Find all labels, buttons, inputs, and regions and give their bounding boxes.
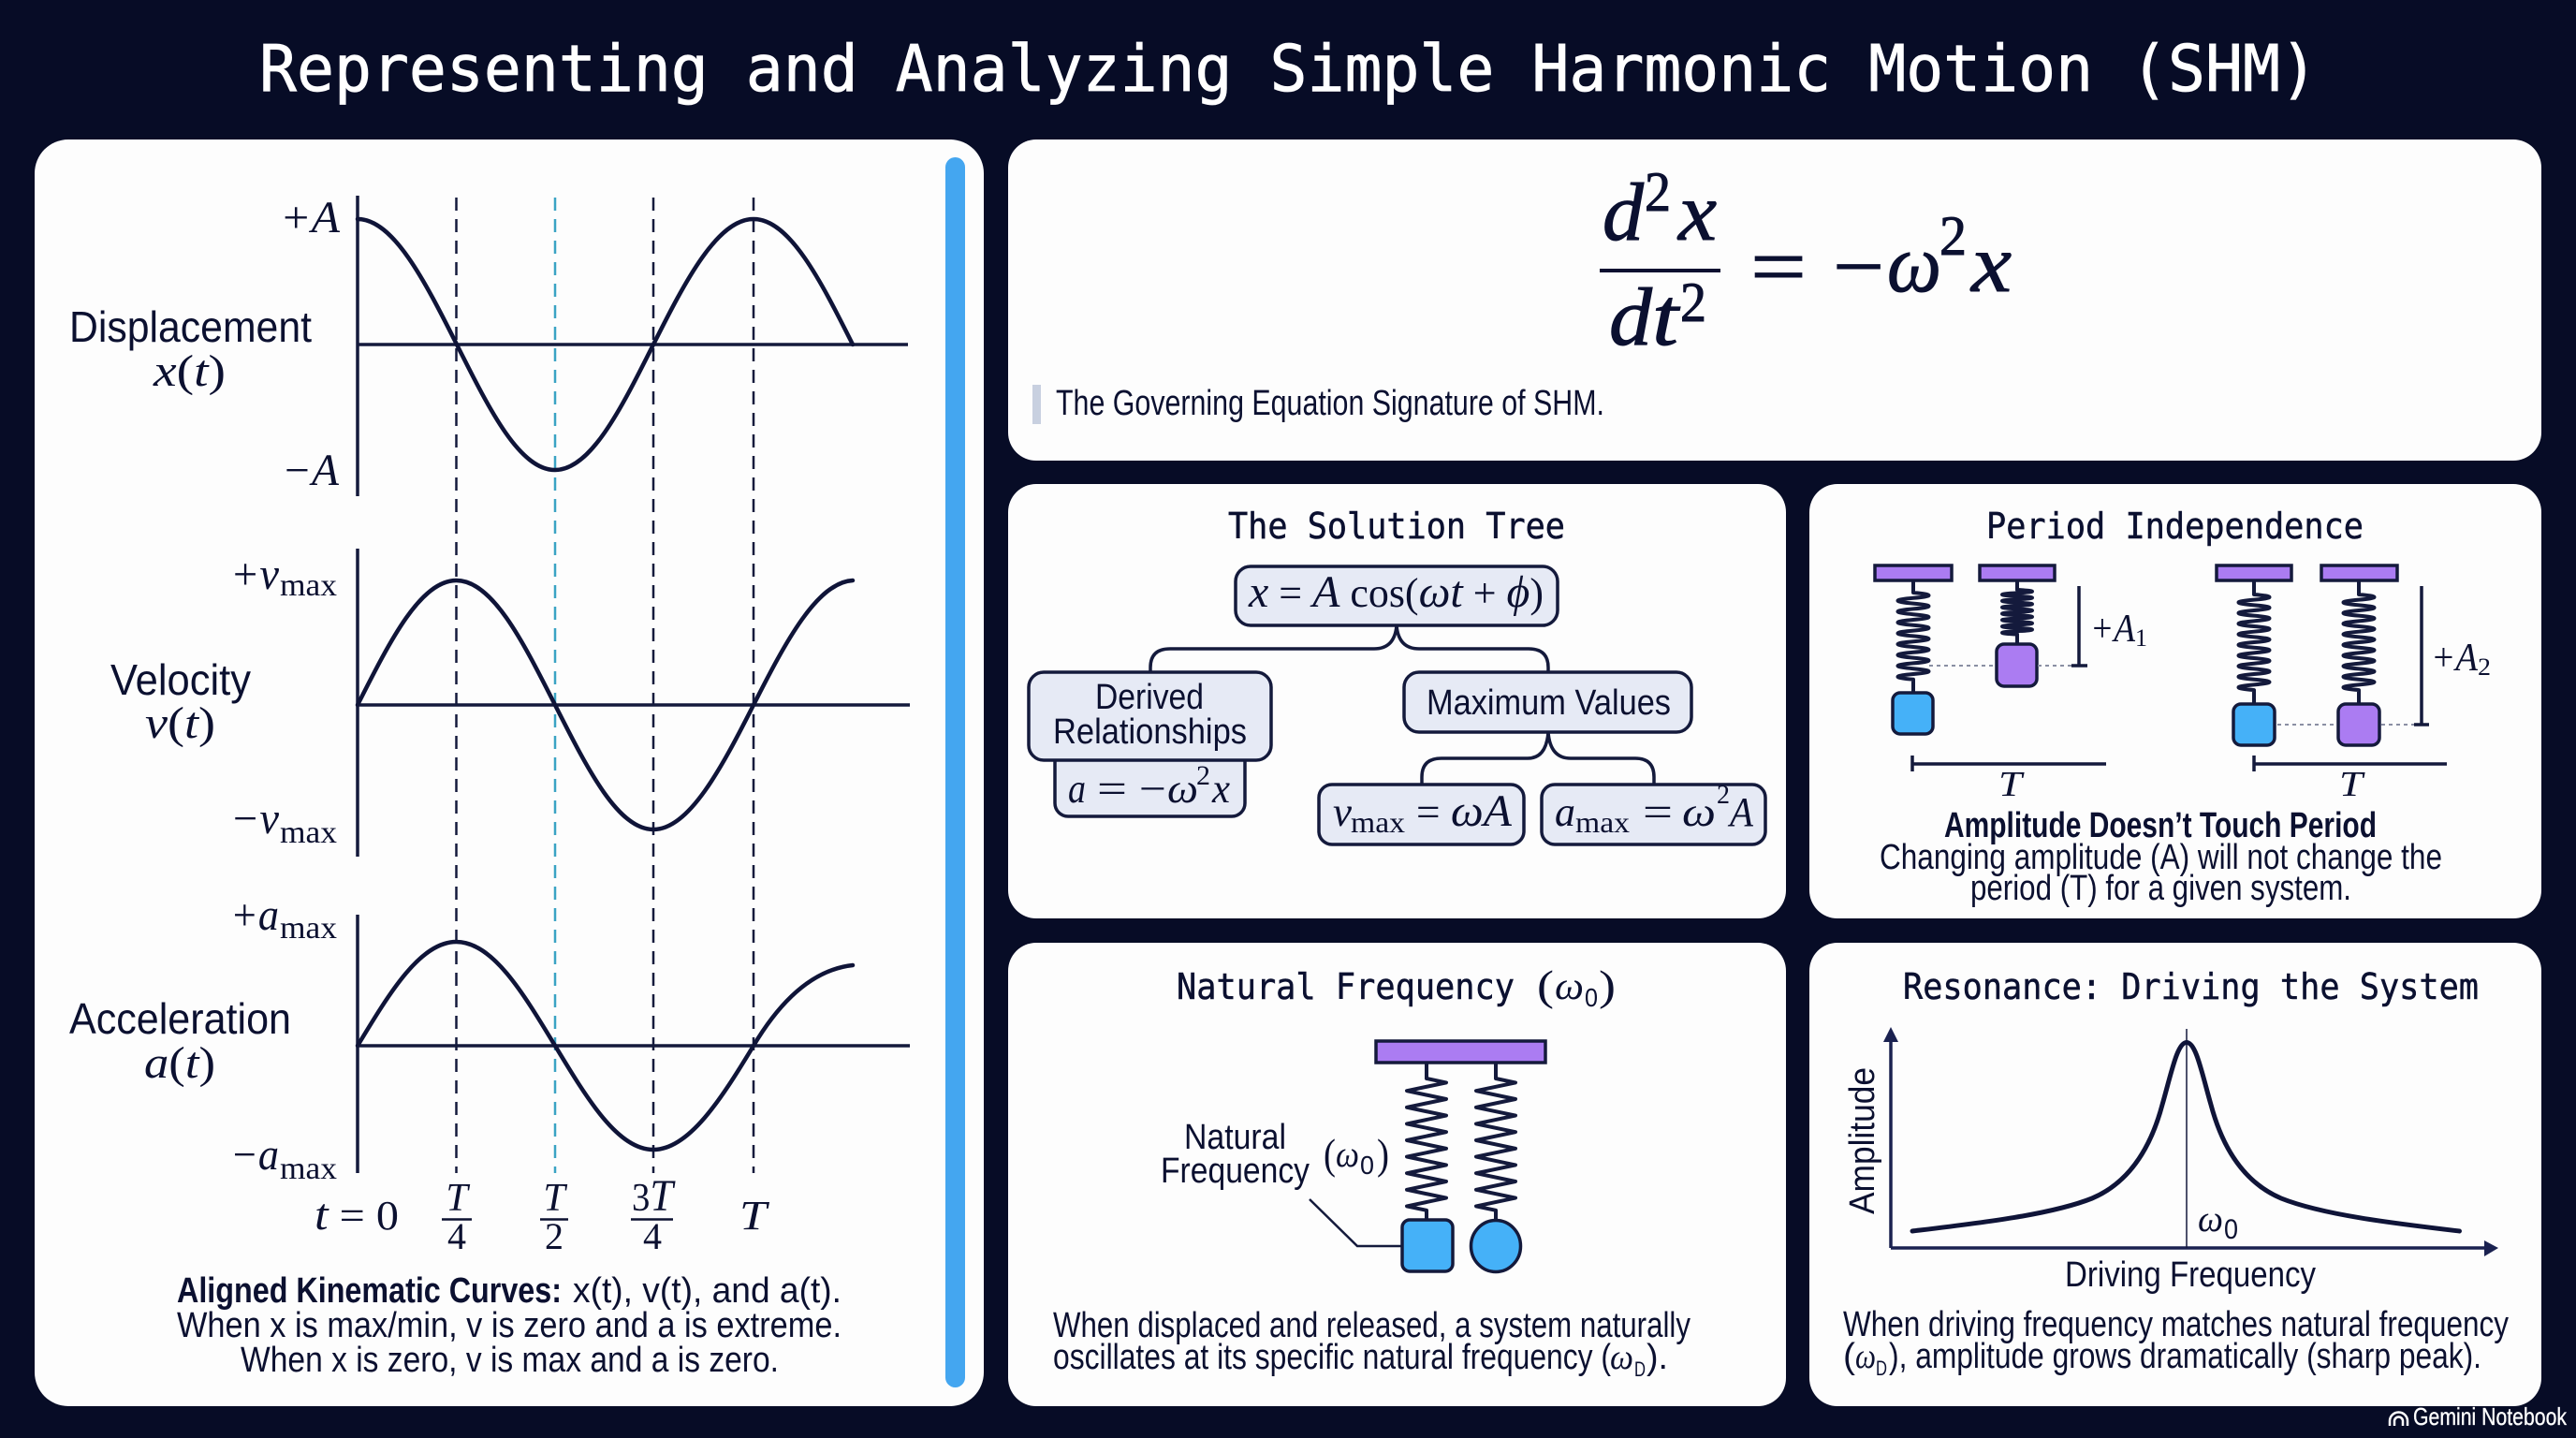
time axis labels: t = 0 xyxy=(315,1190,399,1240)
heading: Natural Frequency xyxy=(1177,966,1515,1007)
caption: amplitude and period: Amplitude Doesn’t Touch Period xyxy=(1944,806,2377,845)
time axis labels: T xyxy=(446,1177,470,1220)
node: v max: v xyxy=(1333,789,1352,835)
resonance chart: Driving Frequency xyxy=(2065,1255,2316,1295)
caption: natural frequency: ). xyxy=(1647,1338,1668,1377)
time axis labels: 3T xyxy=(632,1171,676,1221)
equation: d xyxy=(1609,272,1653,363)
node: derived equation: − xyxy=(1139,766,1166,812)
node: a max: A xyxy=(1727,789,1754,835)
caption: amplitude and period: period (T) for a given system. xyxy=(1970,869,2351,908)
chart: displacement xyxy=(69,193,908,496)
equation: d xyxy=(1603,168,1645,258)
title: Representing and Analyzing Simple Harmonic Motion (SHM) xyxy=(259,32,2318,107)
spring pair: amplitude A2: T xyxy=(2339,765,2365,804)
heading: ( xyxy=(1537,961,1554,1009)
caption: aligned curves: When x is max/min, v is zero and a is extreme. xyxy=(177,1306,842,1345)
equation xyxy=(1600,161,2012,363)
node: a max: ω xyxy=(1682,789,1716,835)
resonance chart: ω xyxy=(2198,1197,2223,1240)
chart: displacement: x(t) xyxy=(153,346,226,396)
heading: ) xyxy=(1599,961,1616,1009)
caption: resonance: ω xyxy=(1855,1337,1876,1376)
chart: velocity: max xyxy=(280,568,337,603)
chart: velocity xyxy=(110,549,910,857)
caption: resonance xyxy=(1843,1305,2509,1380)
node: derived relationships xyxy=(1029,672,1271,760)
caption: amplitude and period xyxy=(1880,806,2442,908)
equation: t xyxy=(1652,272,1681,363)
chart: velocity: v(t) xyxy=(145,698,215,748)
time axis labels: T xyxy=(739,1193,770,1239)
time axis labels xyxy=(315,1171,770,1257)
caption: natural frequency: ω xyxy=(1610,1338,1633,1377)
panel: solution tree xyxy=(1008,484,1786,918)
heading: ω xyxy=(1555,965,1584,1008)
callout: natural frequency: ) xyxy=(1377,1130,1389,1178)
equation: 2 xyxy=(1680,271,1706,333)
callout: natural frequency: ω xyxy=(1336,1133,1359,1175)
node: derived equation: ω xyxy=(1167,766,1198,812)
spring pair: amplitude A2: +A xyxy=(2431,637,2478,680)
chart: velocity: max xyxy=(280,815,337,850)
node: derived equation: x xyxy=(1211,766,1230,812)
callout: natural frequency: ( xyxy=(1324,1130,1336,1178)
resonance chart: 0 xyxy=(2224,1214,2238,1245)
accent bar xyxy=(945,157,965,1387)
caption: natural frequency: oscillates at its specific natural frequency ( xyxy=(1053,1338,1611,1377)
spring pair: amplitude A1 xyxy=(1875,565,2147,804)
spring pair: amplitude A1: T xyxy=(1998,765,2025,804)
caption: natural frequency: D xyxy=(1634,1357,1646,1381)
node: derived equation: 2 xyxy=(1196,760,1210,791)
node: a max xyxy=(1542,781,1765,844)
node: derived equation: a xyxy=(1068,766,1086,812)
node: root equation: x = A cos(ωt + ϕ) xyxy=(1248,567,1544,617)
spring pair: amplitude A2 xyxy=(2217,565,2491,804)
callout: natural frequency: Frequency xyxy=(1161,1152,1310,1191)
caption: natural frequency xyxy=(1053,1306,1690,1381)
chart: displacement: −A xyxy=(282,446,340,495)
panel: governing equation xyxy=(1008,139,2541,461)
caption: aligned curves: When x is zero, v is max and a is zero. xyxy=(241,1341,779,1380)
caption: aligned curves xyxy=(177,1271,842,1380)
node: a max: a xyxy=(1555,789,1575,835)
spring pair: amplitude A2: 2 xyxy=(2478,653,2491,681)
equation: 2 xyxy=(1645,161,1671,223)
caption: amplitude and period: Changing amplitude (A) will not change the xyxy=(1880,838,2442,877)
chart: acceleration: Acceleration xyxy=(69,994,291,1043)
chart: velocity: Velocity xyxy=(110,655,251,704)
node: derived relationships: Relationships xyxy=(1053,712,1247,752)
equation: x xyxy=(1969,219,2012,310)
spring system diagram xyxy=(1376,1041,1545,1271)
chart: acceleration: +a xyxy=(230,890,279,940)
node: v max xyxy=(1319,785,1524,844)
heading: The Solution Tree xyxy=(1228,506,1565,547)
caption: natural frequency: When displaced and released, a system naturally xyxy=(1053,1306,1690,1345)
node: a max: 2 xyxy=(1717,781,1730,810)
chart: acceleration: max xyxy=(280,1152,337,1186)
node: v max: = ωA xyxy=(1416,786,1513,836)
time axis labels: 4 xyxy=(643,1215,662,1257)
time axis labels: T xyxy=(543,1177,567,1220)
caption: resonance: D xyxy=(1876,1357,1887,1380)
panel: resonance xyxy=(1809,943,2541,1406)
equation: x xyxy=(1676,168,1717,258)
equation: 2 xyxy=(1939,205,1967,267)
heading: Resonance: Driving the System xyxy=(1903,966,2479,1007)
panel: natural frequency xyxy=(1008,943,1786,1406)
spring pair: amplitude A1: 1 xyxy=(2135,624,2147,652)
callout: natural frequency: 0 xyxy=(1360,1151,1374,1180)
resonance chart xyxy=(1843,1027,2498,1295)
chart: acceleration: −a xyxy=(230,1130,279,1180)
tree connectors xyxy=(1150,625,1654,785)
heading: Period Independence xyxy=(1986,506,2364,547)
caption: The Governing Equation Signature of SHM. xyxy=(1056,384,1604,423)
time guide lines xyxy=(457,198,754,1173)
node: v max: max xyxy=(1351,805,1405,839)
caption: resonance: ( xyxy=(1843,1337,1855,1376)
callout: natural frequency xyxy=(1161,1118,1402,1246)
node: a max: max xyxy=(1575,805,1630,839)
node: a max: = xyxy=(1643,789,1673,835)
heading xyxy=(1177,961,1616,1012)
node: maximum values: Maximum Values xyxy=(1427,683,1671,723)
caption: aligned curves: Aligned Kinematic Curves: xyxy=(177,1271,562,1311)
chart: acceleration: max xyxy=(280,911,337,946)
resonance chart: Amplitude xyxy=(1843,1067,1882,1214)
node: maximum values xyxy=(1404,672,1691,732)
node: derived relationships: Derived xyxy=(1095,678,1204,717)
panel: period independence xyxy=(1809,484,2541,918)
chart: acceleration: a(t) xyxy=(144,1038,215,1088)
callout: natural frequency: Natural xyxy=(1184,1118,1286,1157)
chart: displacement: Displacement xyxy=(69,302,312,351)
node: derived equation xyxy=(1055,749,1245,816)
panel: aligned kinematic curves xyxy=(35,139,984,1406)
chart: displacement: +A xyxy=(280,193,341,242)
time axis labels: 2 xyxy=(545,1215,564,1257)
chart: acceleration xyxy=(69,890,910,1186)
equation: = xyxy=(1750,222,1807,313)
chart: velocity: +v xyxy=(230,550,280,599)
heading: 0 xyxy=(1585,983,1598,1012)
caption marker xyxy=(1032,385,1041,424)
spring pair: amplitude A1: +A xyxy=(2090,608,2135,651)
node: derived equation: = xyxy=(1097,766,1127,812)
time axis labels: 4 xyxy=(447,1215,466,1257)
caption: aligned curves: x(t), v(t), and a(t). xyxy=(573,1271,842,1311)
equation: − xyxy=(1833,222,1884,313)
equation: ω xyxy=(1887,219,1941,310)
chart: velocity: −v xyxy=(230,794,280,844)
